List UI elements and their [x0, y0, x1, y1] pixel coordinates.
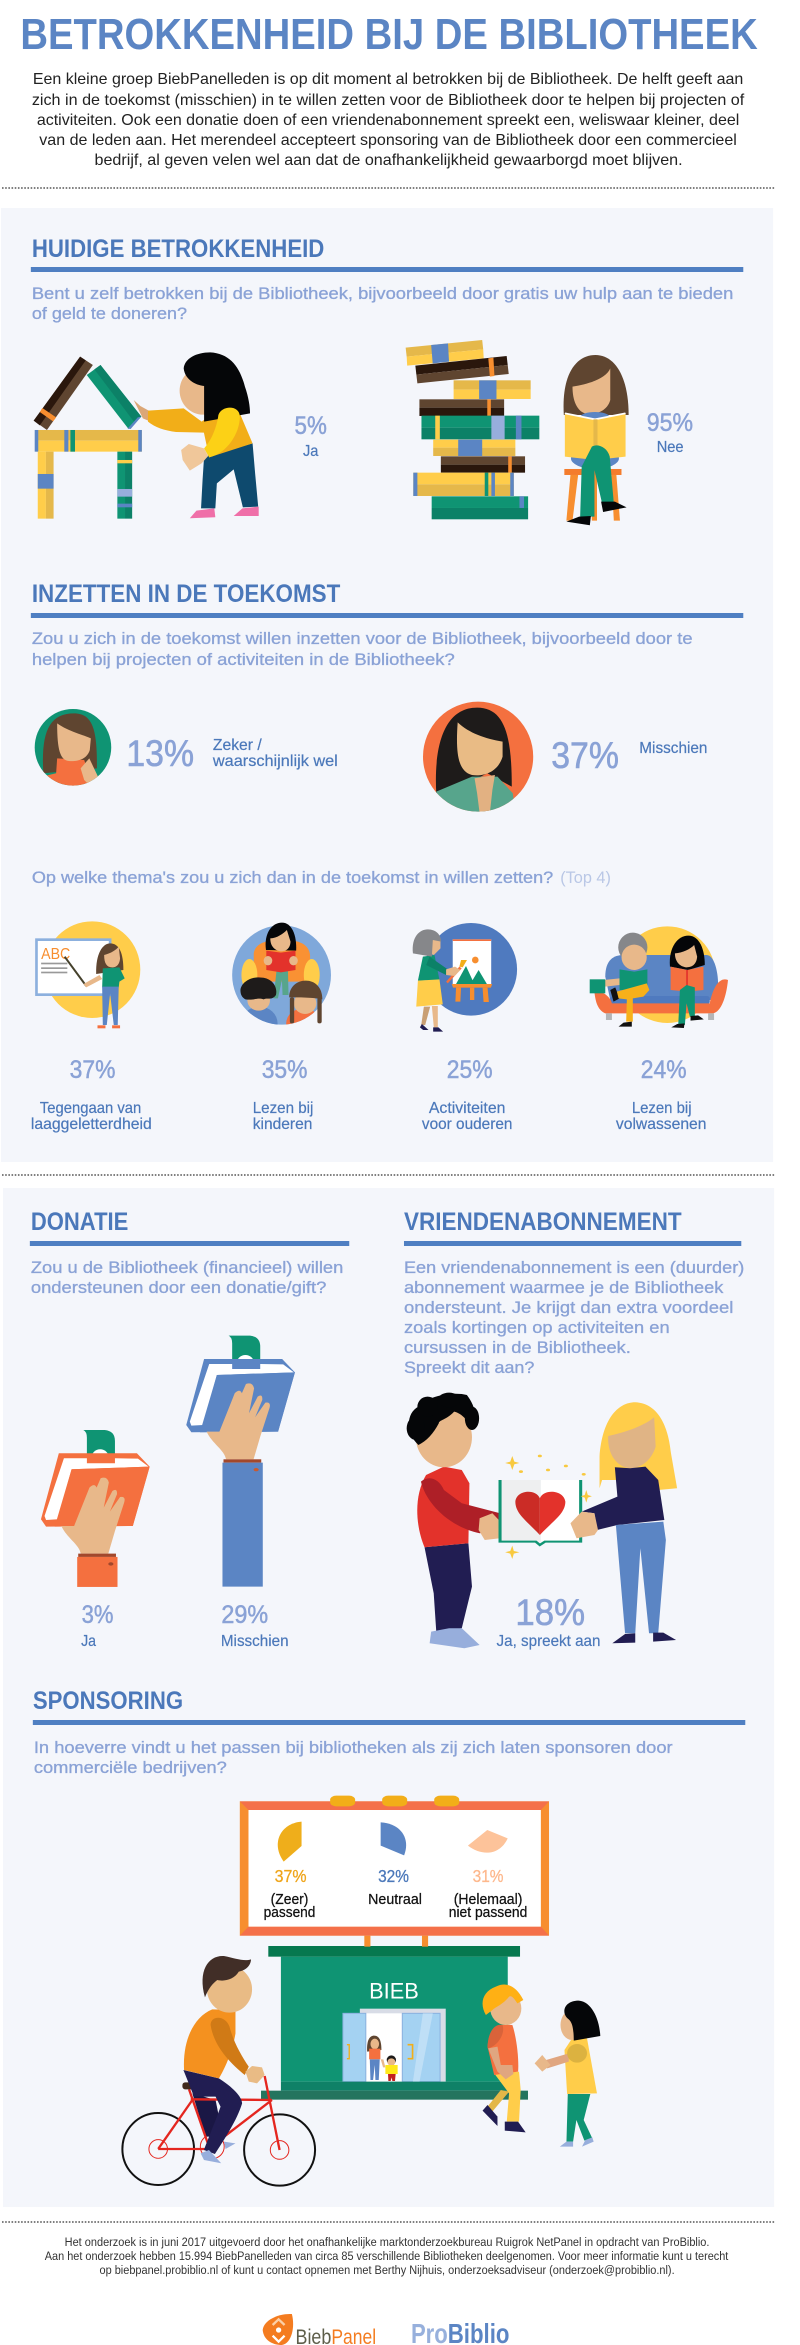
illustration: stack of books and reader: [406, 340, 629, 525]
stat column: activiteiten voor ouderen: Activiteiten: [429, 1100, 505, 1117]
stat column: lezen bij kinderen: [253, 1056, 313, 1133]
percentage: 95% nee: 95%: [647, 409, 693, 437]
heading: huidige betrokkenheid: [31, 235, 743, 272]
billboard labels: 32%: [378, 1866, 409, 1886]
heading: vriendenabonnement: VRIENDENABONNEMENT: [404, 1208, 682, 1236]
stat column: lezen bij kinderen: Lezen bij: [253, 1100, 313, 1117]
stat column: activiteiten voor ouderen: 25%: [447, 1056, 493, 1084]
heading: sponsoring: SPONSORING: [33, 1687, 183, 1715]
illustration: child walking: [483, 1984, 526, 2132]
text: vriendenabonnement explanation: [404, 1259, 744, 1377]
stat: 29% misschien: [221, 1601, 289, 1650]
heading: donatie: [30, 1208, 349, 1246]
intro paragraph: bedrijf, al geven velen wel aan dat de onafhankelijkheid gewaarborgd moet blijven.: [95, 152, 683, 169]
icon: couple reading on sofa: [590, 926, 728, 1028]
stat: 3% ja: Ja: [81, 1633, 96, 1650]
percentage: 95% nee: [647, 409, 693, 456]
heading: inzetten in de toekomst: [31, 580, 743, 618]
stat column: activiteiten voor ouderen: voor ouderen: [422, 1116, 512, 1133]
icon: painter at easel: [413, 923, 517, 1032]
stat column: tegengaan van laaggeletterdheid: 37%: [70, 1056, 115, 1084]
billboard labels: niet passend: [449, 1904, 527, 1921]
stat column: lezen bij volwassenen: volwassenen: [616, 1116, 706, 1133]
question: donatie: Zou u de Bibliotheek (financieel) willen: [31, 1259, 343, 1277]
stat column: lezen bij volwassenen: 24%: [641, 1056, 687, 1084]
percentage: 5% ja: [295, 412, 327, 460]
text: vriendenabonnement explanation: Spreekt dit aan?: [404, 1359, 534, 1377]
icon: teacher at board: [36, 921, 140, 1028]
text: vriendenabonnement explanation: abonnement waarmee je de Bibliotheek: [404, 1279, 724, 1297]
stat: 13% zeker / waarschijnlijk wel: Zeker /: [213, 737, 262, 754]
intro paragraph: activiteiten. Ook een donatie doen of een vriendenabonnement spreekt een, weliswaar kleiner, deel: [37, 112, 739, 129]
billboard labels: 37%: [275, 1866, 307, 1886]
heading: sponsoring: [33, 1687, 745, 1725]
intro paragraph: van de leden aan. Het merendeel accepteert sponsoring van de Bibliotheek door een commercieel: [39, 132, 737, 149]
illustration: girl building a house of books: [34, 352, 259, 519]
illustration: cyclist: [122, 1956, 315, 2186]
stat: 18% ja, spreekt aan: 18%: [515, 1592, 585, 1633]
stat: 37% misschien: Misschien: [639, 740, 707, 757]
icon: reading to children: [232, 922, 331, 1025]
icon: woman thumbs up: [35, 709, 111, 787]
question: sponsoring: [34, 1739, 673, 1777]
illustration: girl with outstretched arm: [535, 2001, 600, 2147]
question: huidige betrokkenheid: Bent u zelf betrokken bij de Bibliotheek, bijvoorbeeld door gratis uw hulp aan te bieden: [32, 285, 733, 303]
panel: lower background: [3, 1188, 774, 2207]
percentage: 95% nee: Nee: [657, 439, 684, 456]
footer text: op biebpanel.probiblio.nl of kunt u contact opnemen met Berthy Nijhuis, onderzoeksadviseur (onderzoek@probiblio.nl).: [100, 2263, 675, 2277]
heading: huidige betrokkenheid: HUIDIGE BETROKKENHEID: [32, 235, 324, 263]
intro paragraph: zich in de toekomst (misschien) in te willen zetten voor de Bibliotheek door te helpen bij projecten of: [32, 92, 745, 109]
billboard labels: 31%: [473, 1866, 504, 1886]
question: thema's top 4: Op welke thema's zou u zich dan in de toekomst in willen zetten?: [32, 869, 553, 887]
stat: 13% zeker / waarschijnlijk wel: waarschijnlijk wel: [212, 753, 338, 770]
stat: 37% misschien: 37%: [551, 735, 619, 776]
footer text: [45, 2235, 729, 2277]
stat: 37% misschien: [551, 735, 707, 776]
intro paragraph: [32, 71, 745, 169]
stat column: tegengaan van laaggeletterdheid: [31, 1056, 152, 1133]
stat column: lezen bij volwassenen: [616, 1056, 706, 1133]
logo: biebpanel: [263, 2314, 376, 2345]
question: huidige betrokkenheid: [32, 285, 733, 323]
stat: 13% zeker / waarschijnlijk wel: 13%: [126, 733, 194, 774]
building with door: [261, 1946, 528, 2100]
stat: 3% ja: 3%: [82, 1601, 113, 1629]
stat column: lezen bij kinderen: 35%: [262, 1056, 307, 1084]
question: sponsoring: In hoeverre vindt u het passen bij bibliotheken als zij zich laten sponsoren door: [34, 1739, 673, 1757]
illustration: short hand with orange book and money: [41, 1430, 150, 1587]
stat column: lezen bij volwassenen: Lezen bij: [632, 1100, 692, 1117]
question: inzetten: Zou u zich in de toekomst willen inzetten voor de Bibliotheek, bijvoorbeeld door te: [32, 630, 693, 648]
logo: probiblio: [411, 2318, 509, 2345]
illustration: man and woman exchanging heart book: [407, 1393, 677, 1648]
billboard labels: [264, 1866, 527, 1921]
question: inzetten: [32, 630, 693, 669]
footer text: Het onderzoek is in juni 2017 uitgevoerd door het onafhankelijke marktonderzoekbureau Ruigrok NetPanel in opdracht van ProBiblio.: [65, 2235, 709, 2249]
billboard labels: (Zeer): [271, 1891, 308, 1908]
stat: 13% zeker / waarschijnlijk wel: [126, 733, 338, 774]
percentage: 5% ja: Ja: [303, 443, 319, 460]
icon: teacher at board: ABC: [41, 946, 70, 963]
billboard labels: passend: [264, 1904, 315, 1921]
question: inzetten: helpen bij projecten of activiteiten in de Bibliotheek?: [32, 651, 455, 669]
heading: vriendenabonnement: [404, 1208, 741, 1246]
text: vriendenabonnement explanation: zoals kortingen op activiteiten en: [404, 1319, 670, 1337]
billboard labels: (Helemaal): [454, 1891, 522, 1908]
stat: 18% ja, spreekt aan: Ja, spreekt aan: [497, 1633, 600, 1650]
question: huidige betrokkenheid: of geld te doneren?: [32, 305, 187, 323]
text: vriendenabonnement explanation: Een vriendenabonnement is een (duurder): [404, 1259, 744, 1277]
stat: 3% ja: [81, 1601, 113, 1650]
heading: donatie: DONATIE: [31, 1208, 128, 1236]
text: vriendenabonnement explanation: cursussen in de Bibliotheek.: [404, 1339, 631, 1357]
panel: top background: [1, 208, 773, 1162]
stat: 18% ja, spreekt aan: [497, 1592, 600, 1650]
stat: 29% misschien: 29%: [221, 1601, 268, 1629]
percentage: 5% ja: 5%: [295, 412, 327, 440]
question: thema's top 4: (Top 4): [560, 869, 611, 887]
question: donatie: [31, 1259, 343, 1297]
illustration: tall hand with blue book and money: [186, 1336, 295, 1587]
stat: 29% misschien: Misschien: [221, 1633, 289, 1650]
billboard with sponsoring results: [240, 1796, 549, 1947]
billboard labels: Neutraal: [368, 1891, 422, 1908]
footer text: Aan het onderzoek hebben 15.994 BiebPanelleden van circa 85 verschillende Bibliotheken deelgenomen. Voor meer informatie kunt u terecht: [45, 2249, 729, 2263]
stat column: lezen bij kinderen: kinderen: [253, 1116, 312, 1133]
intro paragraph: Een kleine groep BiebPanelleden is op dit moment al betrokken bij de Bibliotheek. De helft geeft aan: [33, 71, 743, 88]
icon: woman thinking: [423, 702, 533, 813]
heading: inzetten in de toekomst: INZETTEN IN DE TOEKOMST: [32, 580, 340, 608]
stat column: activiteiten voor ouderen: [422, 1056, 512, 1133]
question: donatie: ondersteunen door een donatie/gift?: [31, 1279, 326, 1297]
stat column: tegengaan van laaggeletterdheid: Tegengaan van: [40, 1100, 141, 1117]
building with door: BIEB: [369, 1978, 419, 2003]
question: sponsoring: commerciële bedrijven?: [34, 1759, 227, 1777]
text: vriendenabonnement explanation: ondersteunt. Je krijgt dan extra voordeel: [404, 1299, 733, 1317]
stat column: tegengaan van laaggeletterdheid: laaggeletterdheid: [31, 1116, 152, 1133]
